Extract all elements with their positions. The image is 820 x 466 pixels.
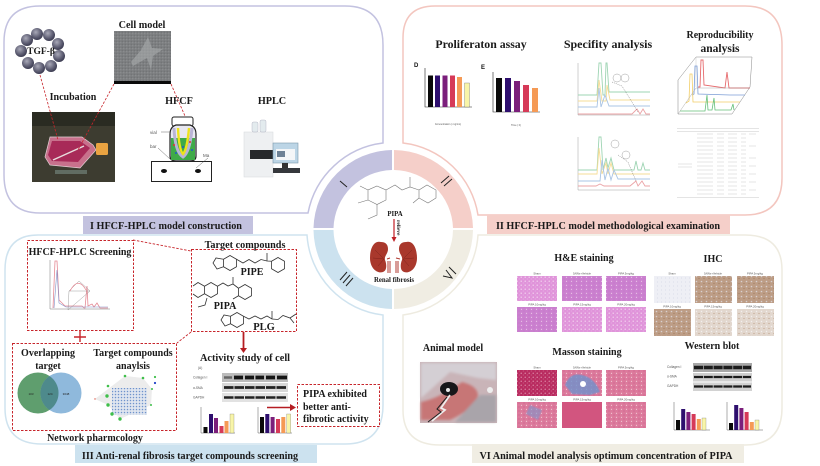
arrow: to conclusion (267, 404, 296, 411)
heading: animal model: Animal model (423, 343, 483, 354)
table: reproducibility data (677, 128, 759, 198)
image grid: H&E: PIPA 15mg/kg (573, 302, 591, 306)
image: western blot: GAPDH (667, 384, 679, 388)
icon: TGF-beta bead ring: TGF-β (27, 47, 55, 57)
bar chart: cell quantification 2 (258, 407, 292, 433)
panel label: VI: VI Animal model analysis optimum concentration of PIPA (479, 451, 733, 462)
panel: I HFCF-HPLC model construction (4, 6, 383, 213)
heading: activity study: Activity study of cell (200, 353, 290, 364)
box: network pharmacology: anaylsis (116, 361, 150, 372)
heading: proliferation assay: Proliferaton assay (435, 37, 527, 51)
panel label: VI (472, 444, 744, 463)
chart: chromatogram A (578, 63, 650, 115)
image grid: H&E: PIPA 10mg/kg (528, 302, 546, 306)
image: western blot: α-SMA (667, 374, 678, 378)
callout: PIPA conclusion: PIPA exhibited (303, 389, 367, 400)
arrow: to activity study (240, 332, 247, 353)
image grid: Masson: Sham (533, 366, 541, 370)
bar chart: D (414, 63, 472, 126)
image grid: H&E: 5/6Nx+Vehicle (573, 272, 591, 276)
image: western blot of cell: (A) (198, 366, 202, 370)
panel label: III (75, 445, 317, 463)
bar chart: E (481, 65, 540, 127)
heading: HPLC: HPLC (258, 96, 286, 107)
box: HFCF-HPLC screening: HFCF-HPLC Screening (29, 247, 131, 258)
molecule: PLG: PLG (253, 322, 275, 333)
panel: III anti-renal fibrosis screening (5, 235, 383, 444)
arrow: relieve: relieve (395, 220, 401, 236)
callout: PIPA conclusion: fibrotic activity (303, 414, 369, 425)
bar chart: cell quantification 1 (201, 407, 235, 433)
image: culture flask photo (32, 112, 115, 182)
image grid: H&E (517, 272, 646, 332)
icon: HPLC instrument (244, 120, 300, 177)
image: western blot of cell: Collagen I (193, 376, 207, 380)
chart: screening chromatogram (50, 260, 110, 310)
chart: 3D chromatogram (678, 57, 752, 114)
heading: western blot: Western blot (685, 341, 740, 352)
bar chart: animal quantification 1 (674, 402, 710, 430)
image grid: Masson: PIPA 15mg/kg (573, 398, 591, 402)
box: network pharmacology: Target compounds (93, 348, 173, 359)
image grid: IHC: 5/6Nx+Vehicle (704, 272, 722, 276)
heading: Masson staining: Masson staining (552, 347, 622, 358)
callout: PIPA conclusion: better anti- (303, 402, 351, 413)
panel: II HFCF-HPLC methodological examination (403, 6, 782, 215)
image: western blot of cell (193, 366, 288, 402)
heading: specificity analysis: Specifity analysis (564, 37, 652, 51)
heading: IHC: IHC (704, 254, 722, 265)
chart: Venn diagram: 124 (47, 392, 53, 396)
box: HFCF-HPLC screening (28, 240, 134, 330)
connector: dashed lines between boxes (133, 240, 191, 343)
heading: cell model: Cell model (119, 20, 166, 31)
panel label: II: II HFCF-HPLC model methodological examination (496, 221, 720, 232)
image grid: IHC: PIPA 15mg/kg (704, 304, 722, 308)
diagram: HFCF vial on stirrer: Ma (203, 153, 210, 158)
image grid: H&E: Sham (533, 272, 541, 276)
arrow: relieve (392, 219, 401, 242)
callout: PIPA conclusion (298, 384, 380, 426)
box: network pharmacology: Overlapping (21, 348, 75, 359)
bar chart: E: E (481, 65, 485, 71)
chart: Venn diagram (18, 372, 82, 414)
panel: VI animal model analysis (403, 235, 782, 445)
icon: kidneys (370, 242, 417, 273)
image: western blot of cell: α-SMA (193, 386, 204, 390)
image: western blot (667, 363, 752, 391)
icon: TGF-beta bead ring (15, 28, 65, 74)
image: animal photo (420, 362, 497, 423)
molecule: PIPA structure: PIPA (387, 211, 403, 218)
panel label: III: III Anti-renal fibrosis target compounds screening (82, 451, 298, 462)
bar chart: E: Time ( h) (511, 124, 521, 127)
panel label: I: I HFCF-HPLC model construction (90, 221, 242, 232)
image grid: IHC (654, 272, 774, 336)
diagram: HFCF vial on stirrer: bar (150, 144, 157, 149)
image: SEM cell (114, 31, 171, 84)
image grid: H&E: PIPA 20mg/kg (617, 302, 635, 306)
box: target compounds: Target compounds (205, 240, 285, 251)
panel label: II (487, 215, 730, 234)
image grid: IHC: PIPA 10mg/kg (663, 304, 681, 308)
image grid: Masson: 5/6Nx+Vehicle (573, 366, 591, 370)
caption: network pharmacology: Network pharmcology (47, 433, 143, 444)
heading: H&E staining: H&E staining (554, 253, 614, 264)
molecule: PIPA structure (358, 177, 436, 219)
image grid: IHC: PIPA 5mg/kg (747, 272, 763, 276)
box: target compounds (192, 240, 296, 333)
bar chart: animal quantification 2 (727, 402, 763, 430)
image grid: Masson: PIPA 20mg/kg (617, 398, 635, 402)
image grid: IHC: Sham (668, 272, 676, 276)
diagram: HFCF vial on stirrer (150, 117, 212, 182)
connector: dashed red lines (40, 75, 185, 150)
image grid: Masson: PIPA 5mg/kg (618, 366, 634, 370)
diagram: HFCF vial on stirrer: vial (150, 130, 157, 135)
chart: compound-target network (94, 375, 156, 421)
icon: plus (74, 331, 86, 342)
heading: incubation: Incubation (50, 92, 97, 103)
box: network pharmacology (12, 344, 176, 430)
heading: HFCF: HFCF (165, 96, 193, 107)
image grid: Masson (517, 366, 646, 428)
image grid: IHC: PIPA 20mg/kg (746, 304, 764, 308)
chart: Venn diagram: 103 (28, 392, 34, 396)
chart: chromatogram B (578, 137, 650, 190)
bar chart: D: Concentration ( mg/mL) (435, 123, 461, 126)
image: western blot: Collagen I (667, 365, 681, 369)
heading: reproducibility analysis: Reproducibility (686, 30, 754, 41)
panel label: I (83, 216, 253, 234)
heading: reproducibility analysis: analysis (700, 43, 740, 55)
chart: Venn diagram: 3048 (63, 392, 70, 396)
caption: renal fibrosis: Renal fibrosis (374, 277, 414, 284)
molecule: PIPE: PIPE (241, 267, 264, 278)
image: western blot of cell: GAPDH (193, 396, 205, 400)
center ring (314, 150, 473, 309)
bar chart: D: D (414, 63, 419, 69)
image grid: H&E: PIPA 5mg/kg (618, 272, 634, 276)
molecule: PIPA: PIPA (214, 301, 237, 312)
box: network pharmacology: target (35, 361, 61, 372)
image grid: Masson: PIPA 10mg/kg (528, 398, 546, 402)
